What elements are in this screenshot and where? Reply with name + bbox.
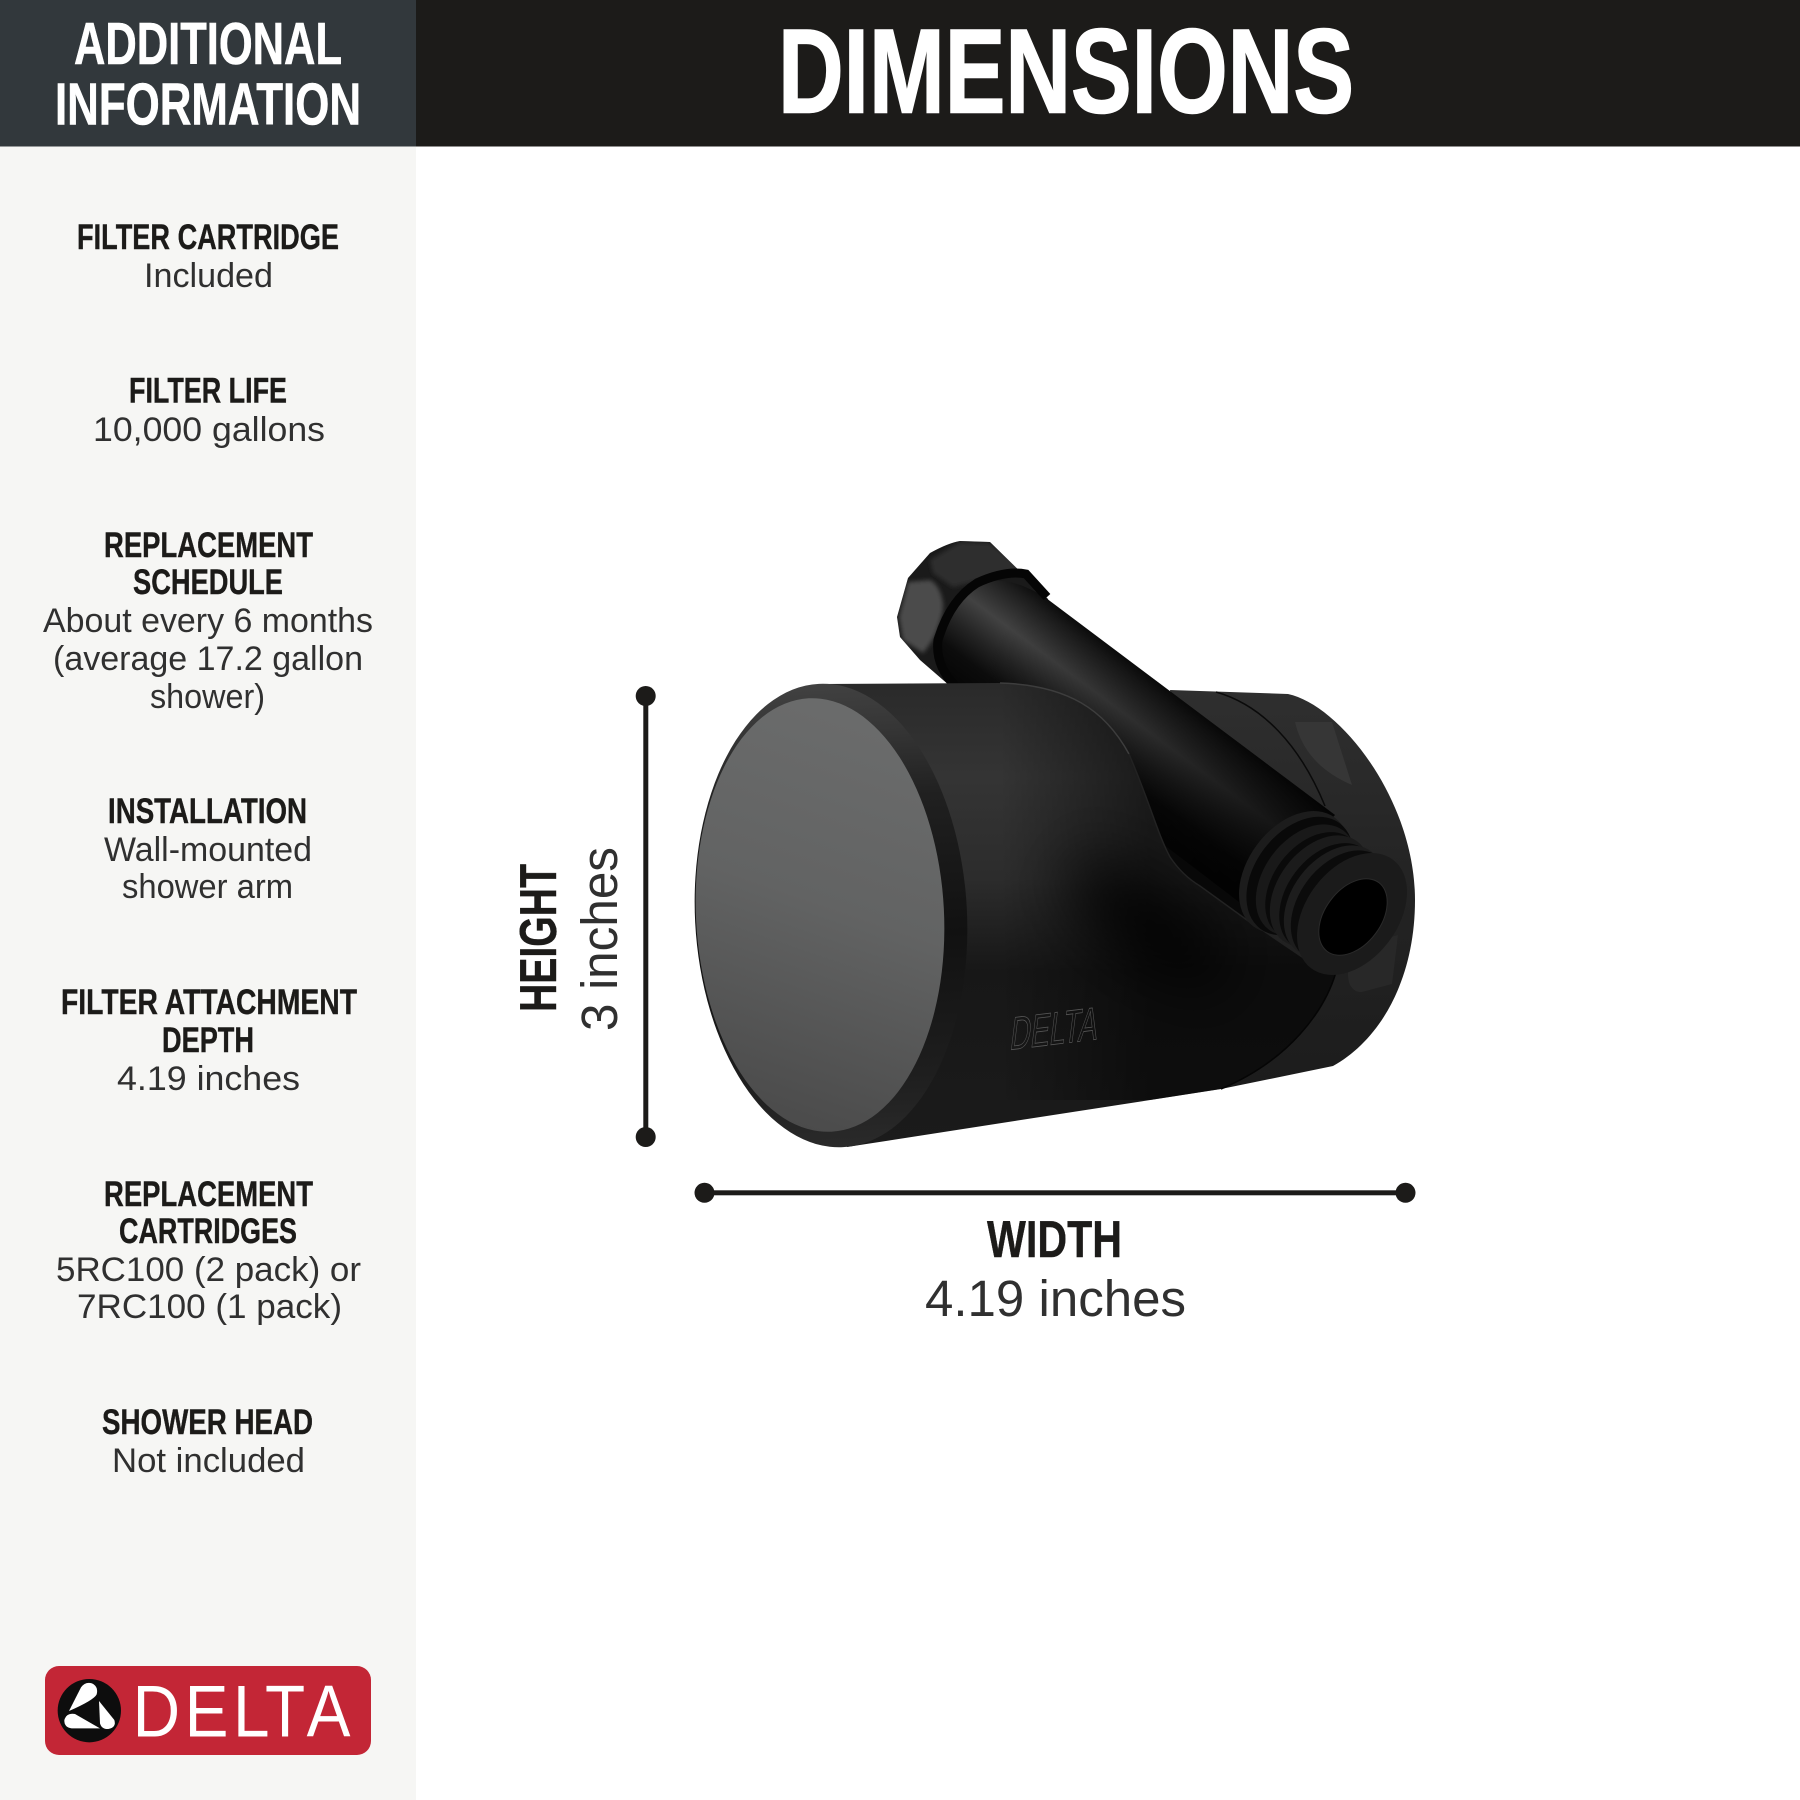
sidebar heading text: INFORMATION <box>55 72 361 138</box>
item: replacement schedule: (average 17.2 gallon <box>53 640 363 678</box>
item: shower head <box>102 1402 313 1480</box>
item: installation: INSTALLATION <box>108 791 307 831</box>
height dimension <box>509 686 656 1147</box>
sidebar heading text: ADDITIONAL <box>74 11 342 77</box>
item: replacement cartridges <box>56 1174 361 1326</box>
item: filter cartridge <box>77 217 339 295</box>
logo wordmark: DELTA <box>133 1670 351 1752</box>
sidebar header <box>0 0 416 146</box>
item: filter attachment depth <box>61 982 357 1098</box>
embossed DELTA lettering: DELTA <box>1008 997 1102 1060</box>
item: filter attachment depth: DEPTH <box>162 1020 254 1060</box>
width line with end dots <box>694 1183 1416 1203</box>
icon: Delta triangle mark <box>58 1679 121 1742</box>
item: replacement cartridges: REPLACEMENT <box>104 1174 313 1214</box>
item: replacement schedule: About every 6 months <box>43 602 373 640</box>
item: installation: Wall-mounted <box>104 831 312 869</box>
sidebar heading text <box>55 11 361 138</box>
main title: DIMENSIONS <box>778 4 1354 138</box>
item: filter life <box>93 371 325 449</box>
item: shower head: Not included <box>112 1442 305 1480</box>
item: replacement schedule: SCHEDULE <box>133 562 283 602</box>
panel: dimensions header <box>416 0 1800 146</box>
width value: 4.19 inches <box>925 1270 1186 1327</box>
item: replacement cartridges: 7RC100 (1 pack) <box>77 1288 342 1326</box>
height line with end dots <box>636 686 656 1147</box>
item: replacement cartridges: CARTRIDGES <box>119 1211 297 1251</box>
width label: WIDTH <box>987 1210 1122 1268</box>
outlet opening <box>1305 866 1401 968</box>
item: filter attachment depth: 4.19 inches <box>117 1060 300 1098</box>
product: shower filter <box>683 541 1430 1154</box>
item: replacement schedule: shower) <box>150 678 265 716</box>
item: replacement schedule <box>43 525 373 716</box>
item: filter cartridge: Included <box>144 257 273 295</box>
body rim <box>683 677 979 1154</box>
item: replacement cartridges: 5RC100 (2 pack) or <box>56 1251 361 1289</box>
item: filter life: 10,000 gallons <box>93 411 325 449</box>
height value: 3 inches <box>571 847 628 1031</box>
filter body <box>800 680 1360 1147</box>
item: filter cartridge: FILTER CARTRIDGE <box>77 217 339 257</box>
panel: additional information sidebar <box>0 0 416 1800</box>
rear hex nut <box>897 541 1050 690</box>
sidebar background <box>0 146 416 1800</box>
front face <box>685 692 955 1138</box>
logo: Delta badge <box>45 1666 371 1755</box>
rear filter cap <box>1100 690 1415 1089</box>
inlet tube <box>938 573 1335 905</box>
height label: HEIGHT <box>509 864 567 1012</box>
width dimension <box>694 1183 1416 1327</box>
item: shower head: SHOWER HEAD <box>102 1402 313 1442</box>
item: installation <box>104 791 312 906</box>
threaded outlet <box>1216 790 1430 996</box>
item: filter attachment depth: FILTER ATTACHMENT <box>61 982 357 1022</box>
item: installation: shower arm <box>122 868 293 906</box>
item: filter life: FILTER LIFE <box>129 371 287 411</box>
item: replacement schedule: REPLACEMENT <box>104 525 313 565</box>
